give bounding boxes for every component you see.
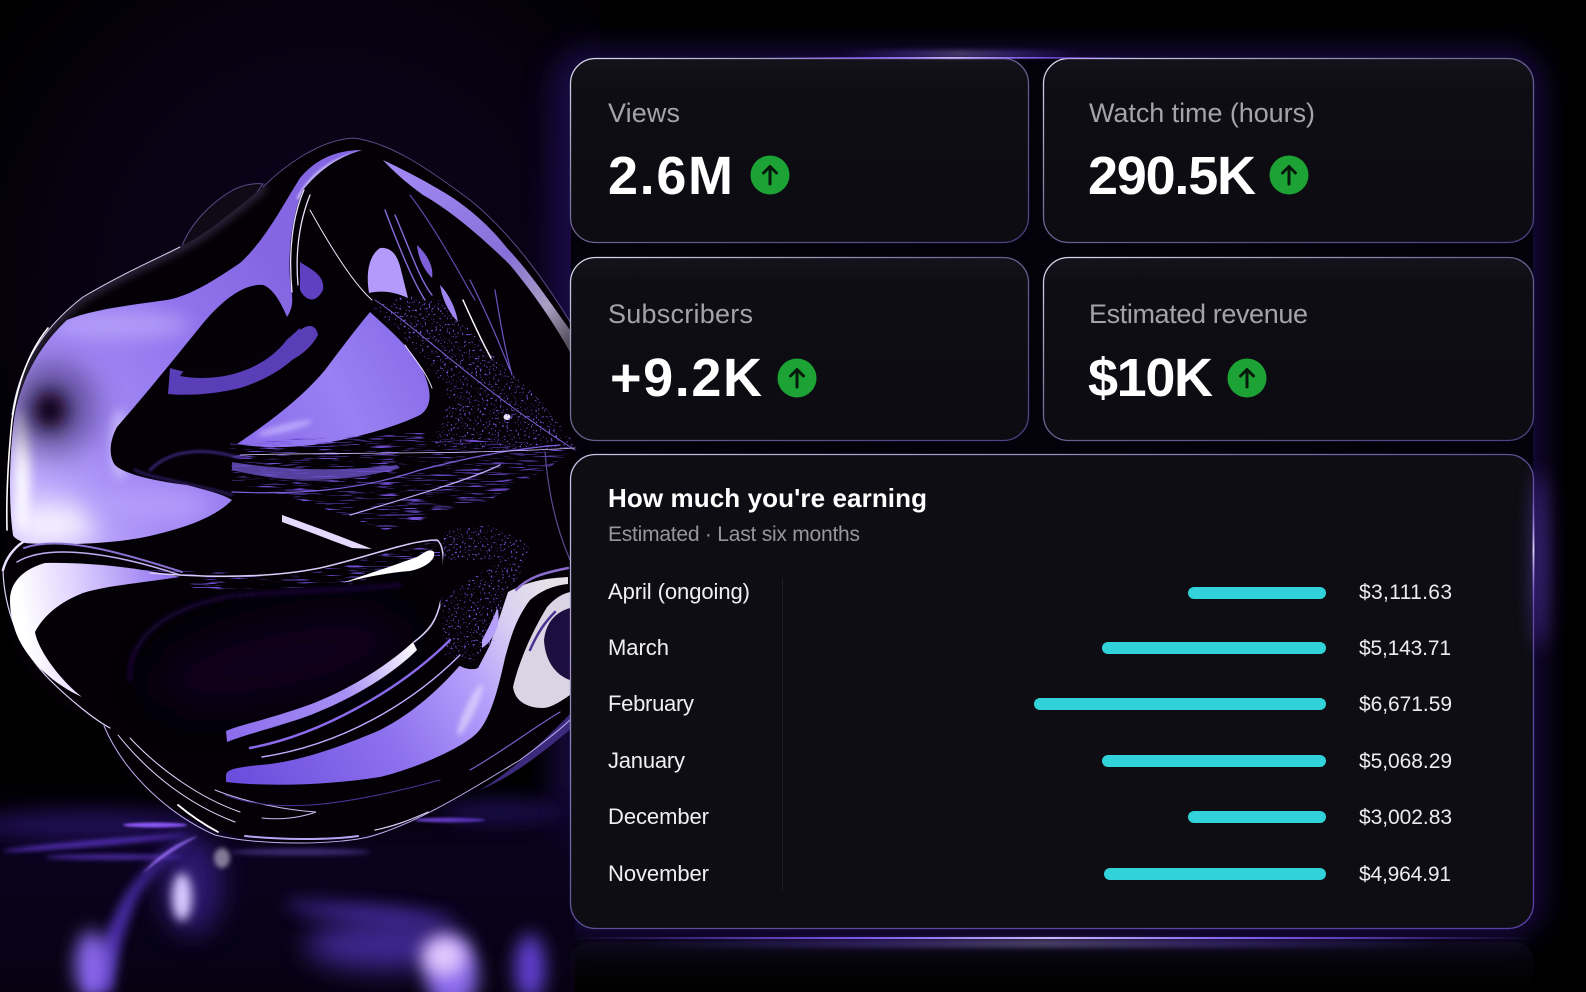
row: January: January (608, 748, 685, 773)
noise fray textures (374, 296, 578, 452)
row: December (608, 804, 1452, 829)
row: February: $6,671.59 (1359, 693, 1452, 716)
row: April (608, 579, 1452, 604)
glow lines (570, 50, 1548, 948)
top rim lines (12, 247, 180, 415)
panel: earnings chart (570, 454, 1534, 928)
middle purple panel (237, 312, 430, 447)
row: March (608, 635, 1451, 660)
row: March: March (608, 635, 669, 660)
horizontal fold bands (232, 445, 575, 560)
icon: up arrow (1270, 156, 1308, 194)
icon: up arrow (1228, 358, 1266, 398)
lower-left crescent (3, 542, 182, 728)
inner rim sheen and dark violet tones (12, 187, 415, 726)
row: December: December (608, 804, 709, 829)
dark fold mass (440, 525, 530, 669)
right white highlight shape (513, 568, 570, 708)
icon: up arrow (750, 156, 790, 194)
main lower band (226, 577, 568, 785)
panel reflection (570, 942, 1534, 992)
panel: subscribers (570, 258, 1028, 440)
panel: views (570, 58, 1028, 242)
top-right sliver (383, 160, 570, 352)
row: February: February (608, 691, 694, 716)
label: watch time: Watch time (hours) (1089, 98, 1315, 128)
mid stripe (282, 515, 372, 549)
purple band in dark fold (168, 328, 302, 395)
subheading: Estimated · Last six months (608, 523, 860, 546)
body silhouette (3, 138, 575, 843)
label: views: Views (608, 98, 680, 128)
row: March: $5,143.71 (1359, 637, 1451, 660)
back bump (182, 184, 263, 246)
row: April: April (ongoing) (608, 579, 750, 604)
row: January (608, 748, 1452, 773)
strands in fray (310, 195, 575, 450)
label: subscribers: Subscribers (608, 299, 753, 329)
floor reflection (0, 780, 575, 992)
panel: watch time (1044, 58, 1534, 242)
value: views: 2.6M (608, 146, 733, 206)
row: November (608, 861, 1451, 886)
row: December: $3,002.83 (1359, 806, 1452, 829)
row: April: $3,111.63 (1359, 581, 1452, 604)
value: subscribers: +9.2K (610, 348, 762, 408)
value: estimated revenue: $10K (1088, 348, 1213, 408)
upper purple lobe (10, 150, 362, 544)
label: estimated revenue: Estimated revenue (1089, 299, 1308, 329)
white lip (150, 540, 444, 642)
liquid glass blob (2, 138, 578, 844)
row: February (608, 691, 1452, 716)
chrome column (280, 190, 323, 365)
panel: estimated revenue (1044, 258, 1534, 440)
band folds (250, 608, 499, 757)
row: November: $4,964.91 (1359, 863, 1451, 886)
icon: up arrow (778, 358, 816, 398)
lower stripe (226, 642, 417, 742)
value: watch time: 290.5K (1088, 146, 1256, 206)
row: November: November (608, 861, 709, 886)
lens strands (104, 712, 572, 843)
right lower sliver (480, 712, 572, 790)
small lavender highlight (368, 248, 408, 298)
row: January: $5,068.29 (1359, 750, 1452, 773)
heading: How much you're earning (608, 483, 927, 513)
